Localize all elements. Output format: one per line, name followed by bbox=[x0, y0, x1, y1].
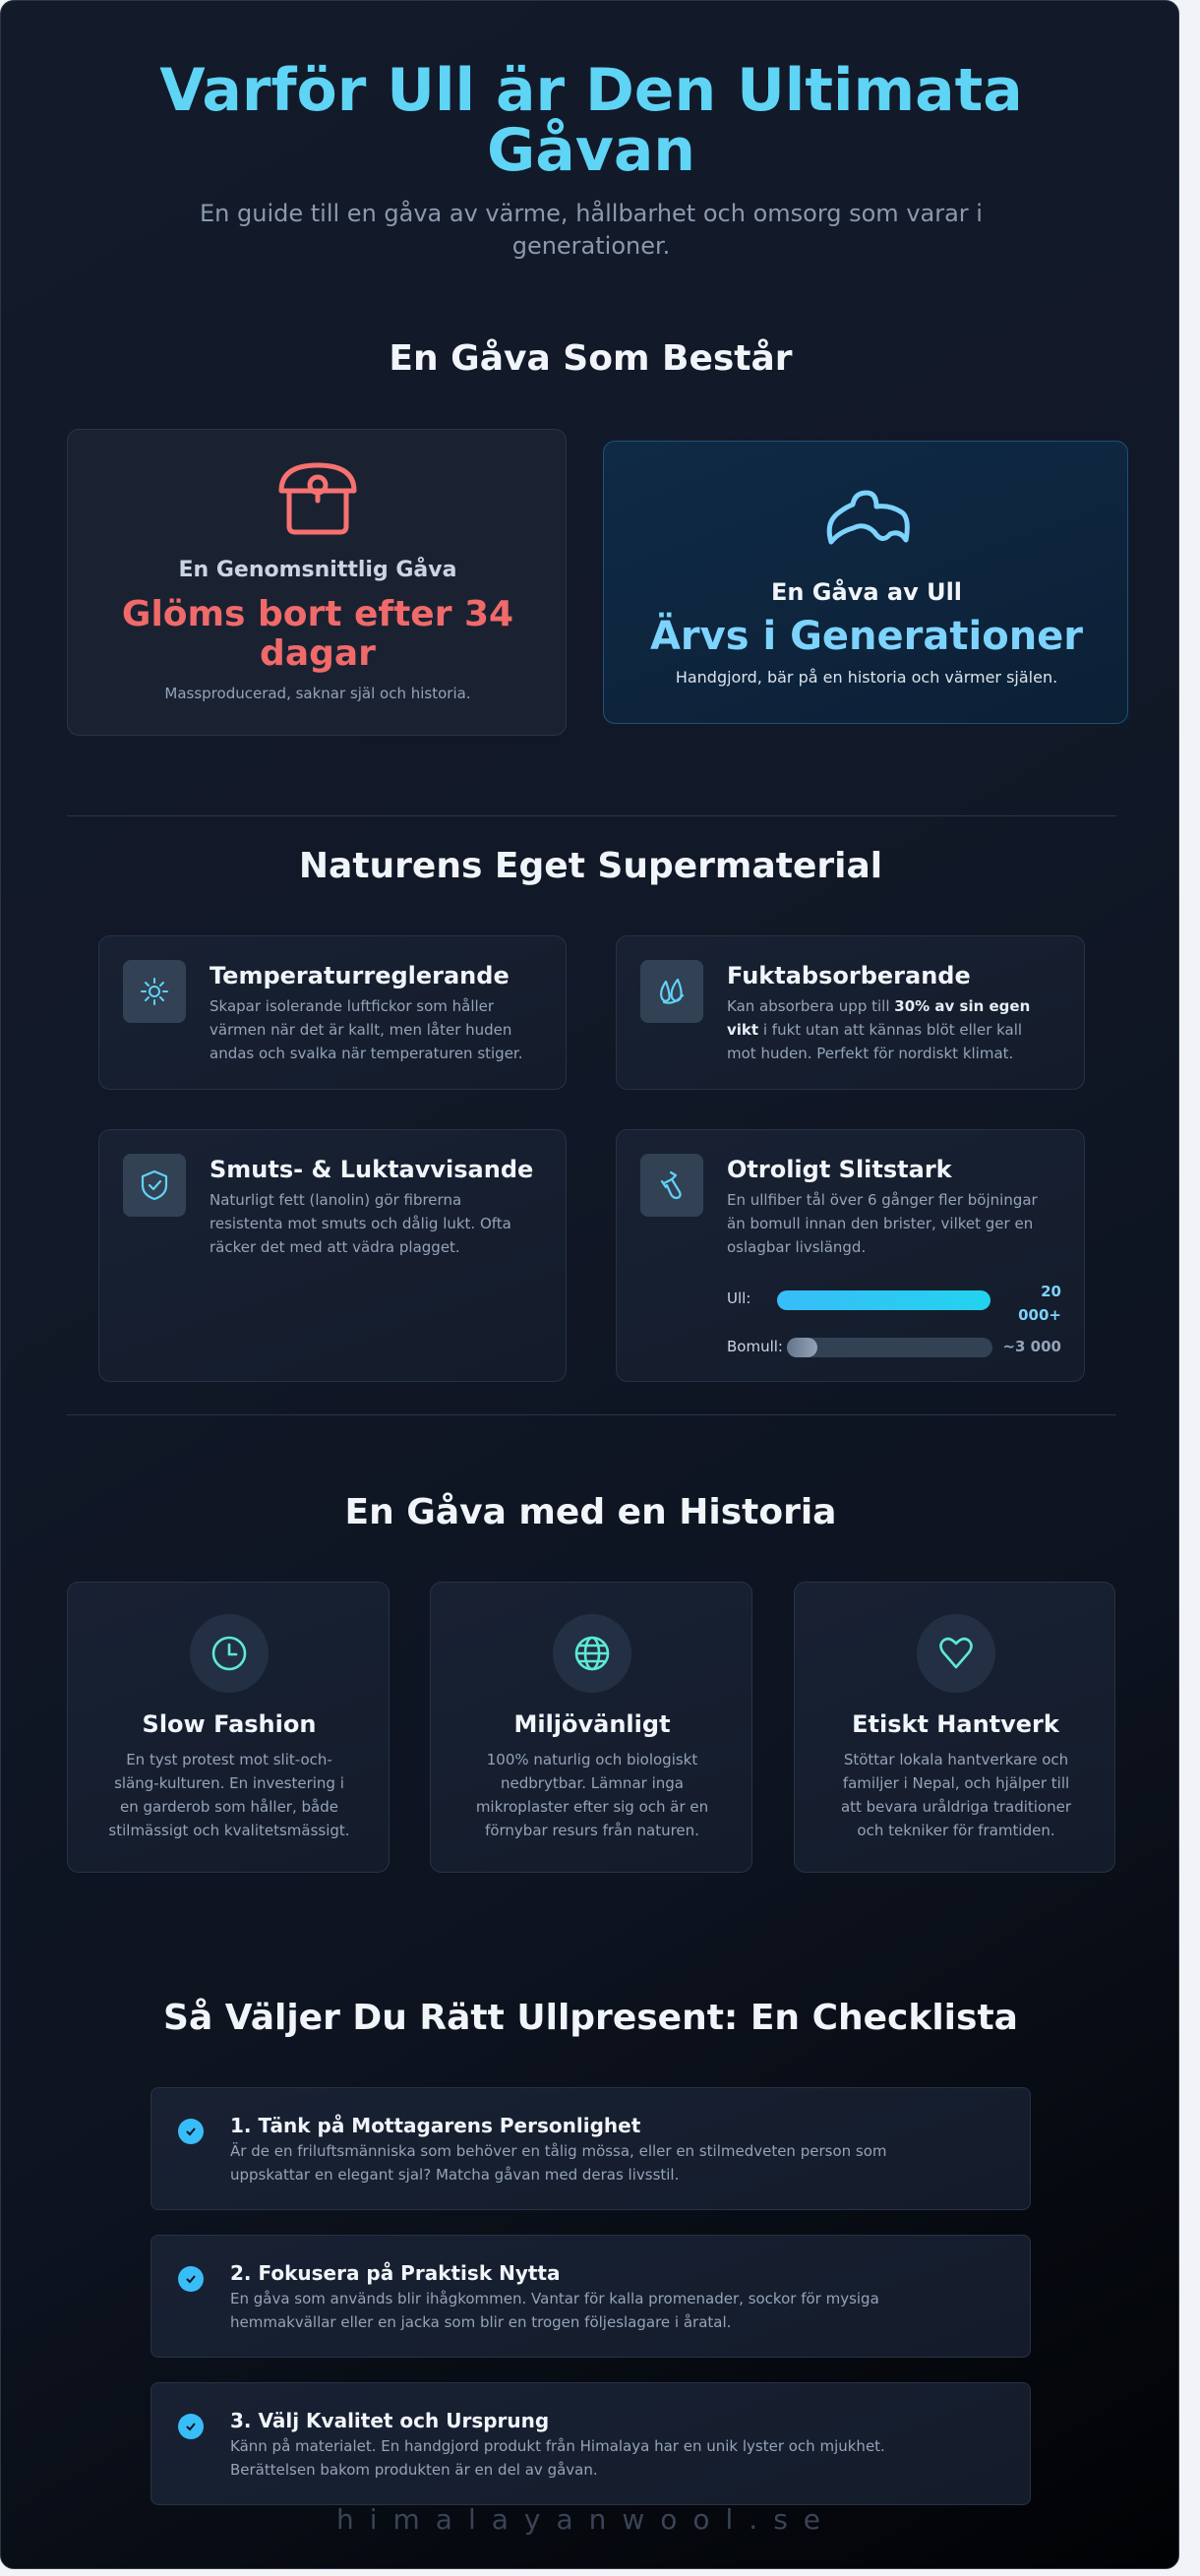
icon: heart bbox=[917, 1614, 995, 1693]
item text: hemmakvällar eller en jacka som blir en trogen följeslagare i åratal. bbox=[230, 2313, 731, 2331]
panel: durable bbox=[616, 1129, 1085, 1382]
title bbox=[159, 56, 1023, 185]
text: släng-kulturen. En investering i bbox=[114, 1774, 344, 1792]
text: Stöttar lokala hantverkare och familjer i Nepal, och hjälper till bbox=[843, 1751, 1069, 1792]
icon: tool bbox=[640, 1154, 703, 1217]
heading: checklist: Så Väljer Du Rätt Ullpresent: En Checklista bbox=[163, 1998, 1018, 2038]
item text bbox=[230, 2290, 879, 2331]
panel: average gift bbox=[67, 429, 567, 736]
footer brand: himalayanwool.se bbox=[336, 2503, 836, 2536]
checklist item 1 bbox=[150, 2087, 1031, 2210]
icon: drops bbox=[640, 960, 703, 1023]
title: Smuts- & Luktavvisande bbox=[210, 1156, 533, 1183]
heading: Naturens Eget Supermaterial: Naturens Eget Supermaterial bbox=[299, 846, 882, 886]
bar chart: 20 bbox=[1041, 1283, 1061, 1300]
title: Slow Fashion bbox=[143, 1710, 316, 1738]
panel: dirt resistant bbox=[98, 1129, 567, 1382]
bar chart: 000+ bbox=[1018, 1306, 1061, 1324]
title: Fuktabsorberande bbox=[727, 962, 971, 989]
heading: En Gåva med en Historia: En Gåva med en Historia bbox=[345, 1492, 836, 1532]
text bbox=[108, 1751, 350, 1839]
text: En tyst protest mot slit-och- bbox=[126, 1751, 332, 1768]
icon: check bbox=[178, 2414, 204, 2439]
item title: 3. Välj Kvalitet och Ursprung bbox=[230, 2409, 549, 2432]
text: att bevara uråldriga traditioner och tekniker för framtiden. bbox=[841, 1798, 1071, 1839]
icon: wool bbox=[826, 490, 910, 545]
bar chart: Ull: bbox=[727, 1289, 750, 1307]
text bbox=[727, 997, 1030, 1062]
text: räcker det med att vädra plagget. bbox=[210, 1238, 460, 1256]
icon: clock bbox=[190, 1614, 269, 1693]
icon: shield bbox=[123, 1154, 186, 1217]
icon: box bbox=[279, 462, 356, 535]
item text: Känn på materialet. En handgjord produkt från Himalaya har en unik lyster och mjukhet. bbox=[230, 2437, 885, 2455]
text: resistenta mot smuts och dålig lukt. Ofta bbox=[210, 1215, 511, 1232]
bar chart: ~3 000 bbox=[1002, 1338, 1061, 1355]
text: en garderob som håller, både stilmässigt och kvalitetsmässigt. bbox=[108, 1798, 350, 1839]
text: En ullfiber tål över 6 gånger fler böjningar bbox=[727, 1191, 1038, 1209]
stat: Ärvs i Generationer bbox=[650, 614, 1083, 659]
panel: eco bbox=[430, 1582, 752, 1873]
text: Skapar isolerande luftfickor som håller värmen när det är kallt, men låter huden andas och svalka när temperaturen stiger. bbox=[210, 997, 523, 1062]
icon: globe bbox=[553, 1614, 631, 1693]
icon: sun bbox=[123, 960, 186, 1023]
text bbox=[841, 1751, 1072, 1839]
title: Varför Ull är Den Ultimata bbox=[159, 56, 1023, 125]
title: Gåvan bbox=[487, 116, 695, 185]
bar chart: Bomull: bbox=[727, 1338, 783, 1355]
title: Etiskt Hantverk bbox=[852, 1710, 1059, 1738]
item title: 1. Tänk på Mottagarens Personlighet bbox=[230, 2114, 640, 2137]
text bbox=[210, 1191, 511, 1256]
item text: Berättelsen bakom produkten är en del av gåvan. bbox=[230, 2461, 598, 2479]
text: 100% naturlig och biologiskt nedbrytbar. Lämnar inga mikroplaster efter sig och är en förnybar resurs från naturen. bbox=[476, 1751, 708, 1839]
item text: Är de en friluftsmänniska som behöver en tålig mössa, eller en stilmedveten person som bbox=[230, 2142, 887, 2160]
text: Naturligt fett (lanolin) gör fibrerna bbox=[210, 1191, 461, 1209]
text: än bomull innan den brister, vilket ger en oslagbar livslängd. bbox=[727, 1215, 1033, 1256]
panel: temperature bbox=[98, 935, 567, 1090]
title: Otroligt Slitstark bbox=[727, 1156, 952, 1183]
text bbox=[727, 1191, 1038, 1256]
item text: En gåva som används blir ihågkommen. Vantar för kalla promenader, sockor för mysiga bbox=[230, 2290, 879, 2307]
subtitle bbox=[200, 200, 983, 260]
title: Miljövänligt bbox=[513, 1710, 671, 1738]
item text bbox=[230, 2142, 887, 2184]
item title: 2. Fokusera på Praktisk Nytta bbox=[230, 2261, 560, 2285]
stat: Glöms bort efter 34 dagar bbox=[122, 594, 513, 674]
caption: Massproducerad, saknar själ och historia. bbox=[164, 685, 471, 702]
label: En Gåva av Ull bbox=[771, 578, 962, 606]
text: mot huden. Perfekt för nordiskt klimat. bbox=[727, 1045, 1013, 1062]
panel: wool gift bbox=[603, 441, 1128, 724]
panel: ethical bbox=[794, 1582, 1115, 1873]
text: Kan absorbera upp till 30% av sin egen vikt i fukt utan att kännas blöt eller kall bbox=[727, 997, 1030, 1039]
panel: moisture bbox=[616, 935, 1085, 1090]
label: En Genomsnittlig Gåva bbox=[179, 558, 456, 582]
item text: uppskattar en elegant sjal? Matcha gåvan med deras livsstil. bbox=[230, 2166, 679, 2184]
checklist item 3 bbox=[150, 2382, 1031, 2505]
item text bbox=[230, 2437, 885, 2479]
subtitle: generationer. bbox=[512, 232, 670, 260]
subtitle: En guide till en gåva av värme, hållbarhet och omsorg som varar i bbox=[200, 200, 983, 227]
checklist item 2 bbox=[150, 2235, 1031, 2358]
panel: slow fashion bbox=[67, 1582, 390, 1873]
icon: check bbox=[178, 2119, 204, 2144]
caption: Handgjord, bär på en historia och värmer själen. bbox=[676, 668, 1057, 687]
title: Temperaturreglerande bbox=[210, 962, 510, 989]
icon: check bbox=[178, 2266, 204, 2292]
bar chart bbox=[727, 1283, 1061, 1357]
heading: En Gåva Som Består: En Gåva Som Består bbox=[389, 338, 793, 379]
